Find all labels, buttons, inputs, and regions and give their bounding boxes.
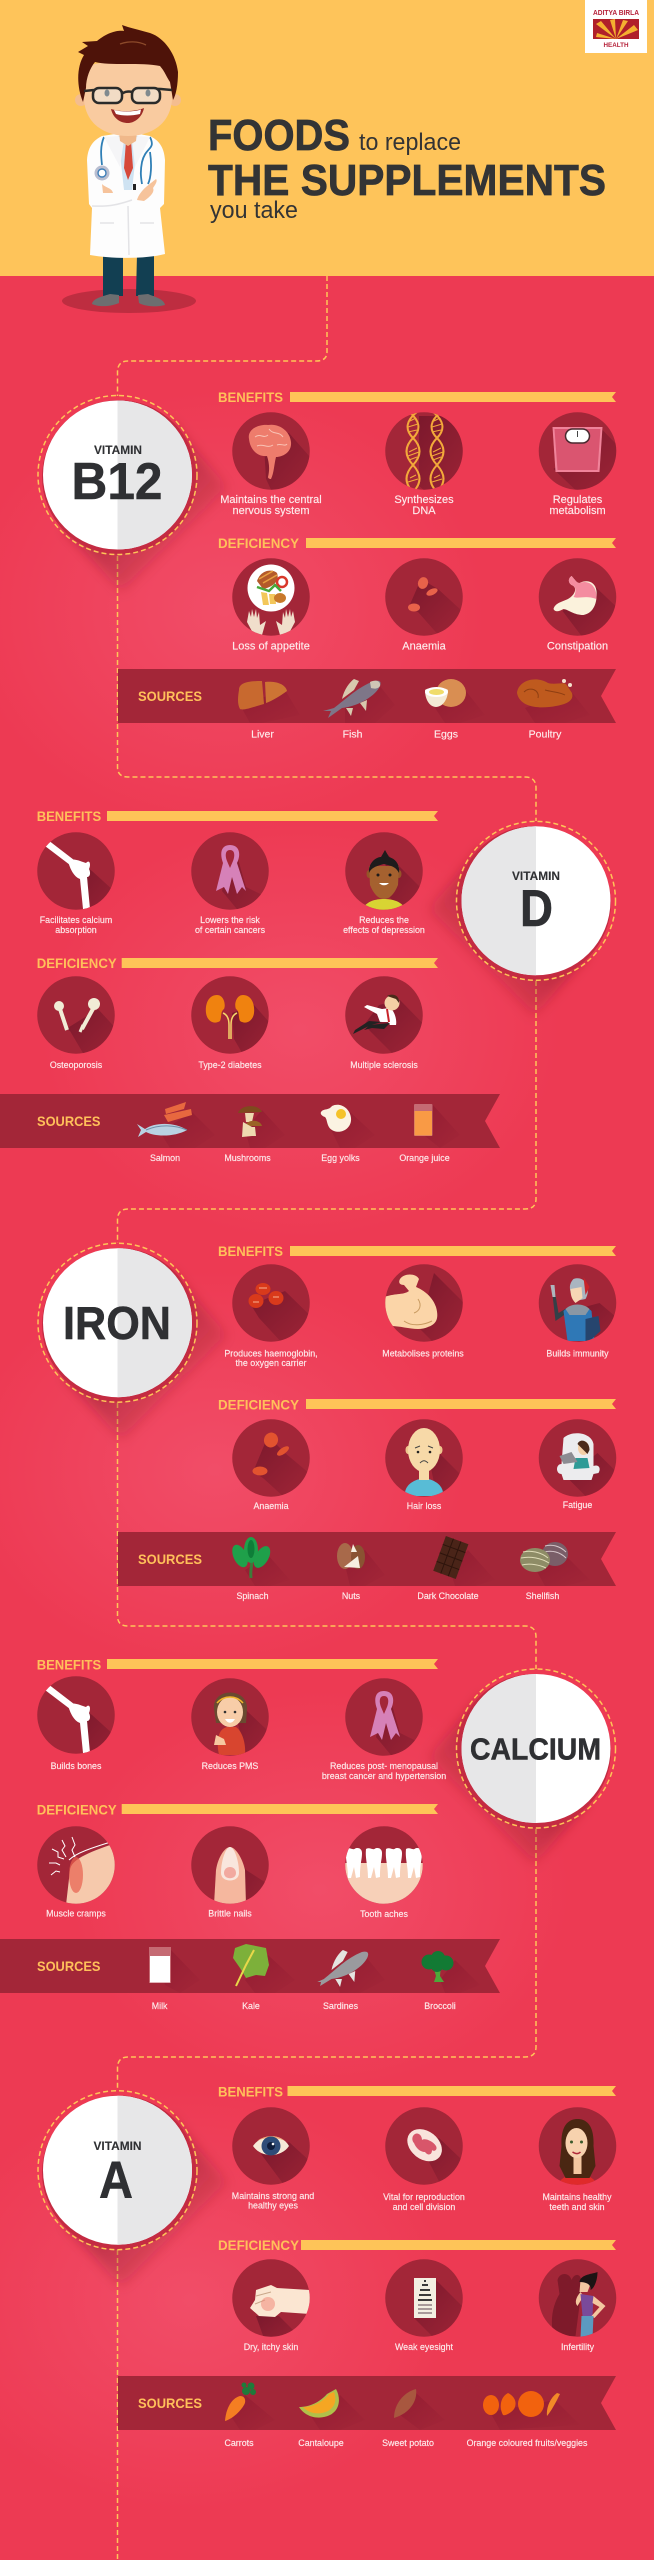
panel: Iron bbox=[38, 1243, 632, 1601]
title: to replace bbox=[359, 129, 461, 156]
label: Fatigue bbox=[563, 1500, 592, 1510]
band: sources: SOURCES bbox=[138, 1551, 202, 1567]
label: Salmon bbox=[150, 1153, 180, 1163]
label: Egg yolks bbox=[321, 1153, 360, 1163]
band: sources: SOURCES bbox=[138, 688, 202, 704]
label: Dry, itchy skin bbox=[244, 2342, 298, 2352]
heading: deficiency: DEFICIENCY bbox=[218, 2237, 300, 2253]
logo: Aditya Birla Health: HEALTH bbox=[604, 42, 629, 49]
icon: milk glass bbox=[149, 1947, 200, 1993]
badge: Vitamin A bbox=[38, 2091, 228, 2287]
heading: benefits bbox=[218, 1243, 616, 1259]
label: Loss of appetite bbox=[232, 640, 310, 652]
label: Mushrooms bbox=[224, 1153, 271, 1163]
band: sources: SOURCES bbox=[138, 2395, 202, 2411]
label: Anaemia bbox=[402, 640, 447, 652]
heading: deficiency: DEFICIENCY bbox=[218, 535, 300, 551]
label: Builds immunity bbox=[546, 1348, 609, 1358]
heading: deficiency bbox=[37, 1802, 438, 1818]
icon: eye bbox=[232, 2107, 310, 2185]
label: Maintains the central bbox=[220, 494, 322, 506]
label: Fish bbox=[343, 728, 363, 740]
label: Anaemia bbox=[253, 1501, 289, 1511]
icon: sweet potato bbox=[394, 2389, 445, 2430]
badge: Vitamin B12 bbox=[38, 396, 228, 592]
label: Eggs bbox=[434, 728, 458, 740]
icon: ribbon bbox=[191, 832, 269, 910]
label: Synthesizes bbox=[394, 494, 454, 506]
label: Infertility bbox=[561, 2342, 595, 2352]
panel: Vitamin A bbox=[38, 2084, 616, 2448]
panel: Vitamin D bbox=[0, 808, 616, 1163]
band: sources: SOURCES bbox=[37, 1958, 100, 1974]
title bbox=[208, 111, 606, 224]
band: sources bbox=[118, 669, 616, 723]
band: sources bbox=[118, 1532, 616, 1586]
label: Reduces PMS bbox=[202, 1761, 258, 1771]
icon: dark chocolate bbox=[433, 1536, 495, 1586]
label: Type-2 diabetes bbox=[198, 1060, 262, 1070]
badge: Vitamin A: VITAMIN bbox=[94, 2139, 142, 2153]
label: the oxygen carrier bbox=[235, 1358, 307, 1368]
heading: benefits bbox=[37, 808, 438, 824]
label: Liver bbox=[251, 728, 274, 740]
label: of certain cancers bbox=[195, 925, 266, 935]
icon: cantaloupe bbox=[299, 2389, 365, 2430]
icon: fish bbox=[323, 679, 395, 723]
label: Tooth aches bbox=[360, 1909, 408, 1919]
label: effects of depression bbox=[343, 925, 425, 935]
icon: stomach bbox=[538, 558, 616, 636]
icon: poultry bbox=[517, 679, 590, 723]
label: and cell division bbox=[393, 2202, 455, 2212]
label: Reduces the bbox=[359, 915, 409, 925]
icon: orange fruits and veggies bbox=[483, 2391, 580, 2430]
band: sources bbox=[0, 1094, 500, 1148]
icon: fried egg bbox=[321, 1105, 375, 1148]
panel: Vitamin B12 bbox=[38, 389, 638, 740]
label: Poultry bbox=[529, 728, 562, 740]
icon: nuts bbox=[337, 1543, 385, 1586]
label: Maintains strong and bbox=[232, 2191, 314, 2201]
heading: benefits: BENEFITS bbox=[37, 1656, 101, 1672]
icon: liver bbox=[238, 681, 300, 723]
label: Nuts bbox=[342, 1591, 361, 1601]
label: Broccoli bbox=[424, 2001, 456, 2011]
label: Regulates bbox=[553, 494, 603, 506]
icon: itchy skin bbox=[232, 2259, 310, 2337]
icon: anaemia cells bbox=[385, 558, 463, 636]
icon: shellfish bbox=[520, 1542, 590, 1586]
dashed connector path bbox=[118, 276, 536, 2560]
icon: orange juice bbox=[414, 1104, 460, 1148]
logo: Aditya Birla Health bbox=[585, 0, 647, 53]
label: teeth and skin bbox=[549, 2202, 605, 2212]
heading: benefits: BENEFITS bbox=[218, 1243, 283, 1259]
label: Sweet potato bbox=[382, 2438, 434, 2448]
heading: benefits: BENEFITS bbox=[218, 389, 283, 405]
label: Brittle nails bbox=[208, 1908, 252, 1918]
icon: falling man bbox=[345, 976, 423, 1054]
icon: bald man bbox=[385, 1419, 463, 1497]
icon: brain bbox=[232, 412, 310, 490]
heading: deficiency bbox=[218, 1396, 616, 1412]
badge: Iron: IRON bbox=[63, 1297, 171, 1349]
label: metabolism bbox=[549, 505, 606, 517]
icon: spinach bbox=[229, 1537, 290, 1586]
label: Shellfish bbox=[526, 1591, 559, 1601]
heading: deficiency: DEFICIENCY bbox=[37, 955, 117, 971]
label: Maintains healthy bbox=[542, 2192, 612, 2202]
label: Carrots bbox=[224, 2438, 254, 2448]
badge: Vitamin B12: VITAMIN bbox=[94, 443, 142, 457]
label: Facilitates calcium bbox=[40, 915, 112, 925]
badge: Vitamin B12: B12 bbox=[72, 453, 162, 511]
label: nervous system bbox=[232, 505, 310, 517]
label: Metabolises proteins bbox=[382, 1348, 464, 1358]
icon: infertility woman bbox=[539, 2259, 616, 2338]
logo: Aditya Birla Health: ADITYA BIRLA bbox=[593, 10, 639, 17]
icon: smiling girl bbox=[191, 1678, 269, 1756]
icon: knight bbox=[538, 1264, 616, 1342]
label: Weak eyesight bbox=[395, 2342, 454, 2352]
label: Hair loss bbox=[407, 1501, 442, 1511]
label: Multiple sclerosis bbox=[350, 1060, 418, 1070]
icon: flexed arm bbox=[385, 1264, 463, 1342]
icon: kale bbox=[233, 1944, 295, 1993]
label: Reduces post- menopausal bbox=[330, 1761, 438, 1771]
icon: kidneys bbox=[191, 976, 269, 1054]
icon: weighing scale bbox=[538, 412, 616, 490]
badge: Vitamin D bbox=[428, 821, 616, 1016]
icon: DNA bbox=[385, 412, 463, 490]
label: Vital for reproduction bbox=[383, 2192, 465, 2202]
heading: deficiency bbox=[218, 2237, 616, 2253]
label: Produces haemoglobin, bbox=[224, 1348, 318, 1358]
label: healthy eyes bbox=[248, 2200, 298, 2210]
band: sources bbox=[118, 2376, 616, 2430]
badge: Vitamin D: D bbox=[520, 880, 553, 938]
heading: deficiency bbox=[218, 535, 616, 551]
label: Sardines bbox=[323, 2001, 359, 2011]
icon: carrot bbox=[225, 2382, 275, 2430]
icon: knee joint bbox=[37, 832, 115, 910]
label: Cantaloupe bbox=[298, 2438, 344, 2448]
label: breast cancer and hypertension bbox=[322, 1771, 446, 1781]
badge: Vitamin A: A bbox=[99, 2152, 133, 2210]
icon: broccoli bbox=[422, 1951, 480, 1993]
label: Muscle cramps bbox=[46, 1908, 106, 1918]
icon: knee joint bbox=[37, 1676, 115, 1754]
heading: benefits: BENEFITS bbox=[37, 808, 101, 824]
label: Builds bones bbox=[51, 1761, 102, 1771]
label: Constipation bbox=[547, 640, 608, 652]
badge: Calcium: CALCIUM bbox=[470, 1732, 601, 1766]
heading: deficiency bbox=[37, 955, 438, 971]
icon: ribbon bbox=[345, 1678, 423, 1756]
label: absorption bbox=[55, 925, 97, 935]
heading: benefits bbox=[37, 1656, 438, 1672]
label: Dark Chocolate bbox=[417, 1591, 479, 1601]
label: Lowers the risk bbox=[200, 915, 260, 925]
icon: osteoporosis bones bbox=[37, 976, 115, 1054]
panel: yellow header bbox=[0, 0, 654, 276]
title: THE SUPPLEMENTS bbox=[208, 156, 606, 205]
heading: benefits bbox=[218, 2084, 616, 2100]
band: sources bbox=[0, 1939, 500, 1993]
icon: salmon bbox=[137, 1102, 215, 1148]
panel: Calcium bbox=[0, 1656, 616, 2011]
label: Orange coloured fruits/veggies bbox=[467, 2438, 588, 2448]
icon: loss of appetite bbox=[232, 558, 310, 636]
icon: sardines bbox=[317, 1950, 385, 1993]
icon: fatigue armchair bbox=[538, 1419, 616, 1497]
heading: benefits: BENEFITS bbox=[218, 2084, 283, 2100]
icon: eggs bbox=[425, 679, 485, 723]
badge: Calcium bbox=[428, 1669, 616, 1864]
badge: Vitamin D: VITAMIN bbox=[512, 869, 560, 883]
icon: woman bbox=[539, 2107, 616, 2185]
title: you take bbox=[210, 197, 298, 224]
heading: benefits bbox=[218, 389, 616, 405]
label: Osteoporosis bbox=[50, 1060, 103, 1070]
icon: haemoglobin cells bbox=[232, 1264, 310, 1342]
icon: eye chart bbox=[385, 2259, 463, 2337]
label: Milk bbox=[152, 2001, 168, 2011]
illustration: doctor bbox=[62, 25, 196, 313]
icon: anaemia cells bbox=[232, 1419, 310, 1497]
icon: mushrooms bbox=[238, 1106, 285, 1148]
label: Spinach bbox=[236, 1591, 269, 1601]
label: Kale bbox=[242, 2001, 260, 2011]
band: sources: SOURCES bbox=[37, 1113, 100, 1129]
icon: teeth bbox=[344, 1826, 424, 1905]
badge: Iron bbox=[38, 1243, 228, 1440]
icon: muscle cramps bbox=[37, 1826, 116, 1905]
icon: brittle nail bbox=[191, 1826, 269, 1904]
label: Orange juice bbox=[399, 1153, 450, 1163]
heading: deficiency: DEFICIENCY bbox=[37, 1802, 117, 1818]
icon: happy man bbox=[345, 832, 423, 910]
label: DNA bbox=[412, 505, 436, 517]
title: FOODS bbox=[208, 111, 350, 160]
heading: deficiency: DEFICIENCY bbox=[218, 1396, 300, 1412]
icon: fetus bbox=[385, 2107, 463, 2185]
